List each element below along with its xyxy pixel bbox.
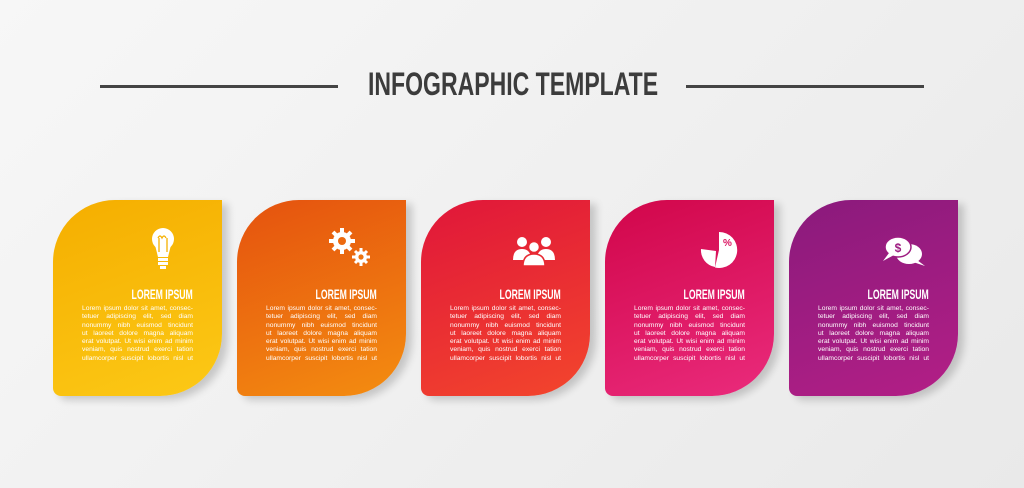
text: ullamcorper suscipit lobortis nisl ut	[82, 355, 193, 362]
panel: card 5	[789, 200, 958, 396]
text: nonummy nibh euismod tincidunt	[82, 322, 193, 329]
title line left	[100, 85, 338, 88]
panel: card 2	[237, 200, 406, 396]
text: ullamcorper suscipit lobortis nisl ut	[818, 355, 929, 362]
text: tetuer adipiscing elit, sed diam	[450, 313, 561, 320]
panel: card 3	[421, 200, 590, 396]
text: Lorem ipsum dolor sit amet, consec-	[450, 305, 561, 312]
text	[266, 305, 377, 362]
icon: people	[513, 237, 555, 266]
text: erat volutpat. Ut wisi enim ad minim	[82, 338, 193, 345]
text: erat volutpat. Ut wisi enim ad minim	[818, 338, 929, 345]
icon: speech bubbles: $	[895, 241, 902, 255]
text: Lorem ipsum dolor sit amet, consec-	[82, 305, 193, 312]
text: Lorem ipsum dolor sit amet, consec-	[634, 305, 745, 312]
panel: card 4	[605, 200, 774, 396]
text: erat volutpat. Ut wisi enim ad minim	[450, 338, 561, 345]
text	[82, 305, 193, 362]
icon: pie chart	[700, 232, 738, 268]
text: ut laoreet dolore magna aliquam	[82, 330, 193, 337]
text: nonummy nibh euismod tincidunt	[450, 322, 561, 329]
heading: LOREM IPSUM	[868, 286, 929, 302]
text: Lorem ipsum dolor sit amet, consec-	[818, 305, 929, 312]
heading: LOREM IPSUM	[500, 286, 561, 302]
text	[818, 305, 929, 362]
heading: LOREM IPSUM	[316, 286, 377, 302]
text: erat volutpat. Ut wisi enim ad minim	[266, 338, 377, 345]
icon: gears	[329, 228, 370, 266]
text: ullamcorper suscipit lobortis nisl ut	[266, 355, 377, 362]
icon: pie chart: %	[723, 238, 732, 249]
text: tetuer adipiscing elit, sed diam	[818, 313, 929, 320]
text: veniam, quis nostrud exerci tation	[82, 346, 193, 353]
text: tetuer adipiscing elit, sed diam	[82, 313, 193, 320]
text: veniam, quis nostrud exerci tation	[266, 346, 377, 353]
text: tetuer adipiscing elit, sed diam	[266, 313, 377, 320]
text	[450, 305, 561, 362]
text: ut laoreet dolore magna aliquam	[634, 330, 745, 337]
text: veniam, quis nostrud exerci tation	[634, 346, 745, 353]
text: ut laoreet dolore magna aliquam	[450, 330, 561, 337]
text: erat volutpat. Ut wisi enim ad minim	[634, 338, 745, 345]
text: ullamcorper suscipit lobortis nisl ut	[634, 355, 745, 362]
panel: card 1	[53, 200, 222, 396]
text: ut laoreet dolore magna aliquam	[818, 330, 929, 337]
heading: LOREM IPSUM	[132, 286, 193, 302]
text: nonummy nibh euismod tincidunt	[266, 322, 377, 329]
text: Lorem ipsum dolor sit amet, consec-	[266, 305, 377, 312]
text: tetuer adipiscing elit, sed diam	[634, 313, 745, 320]
text: nonummy nibh euismod tincidunt	[634, 322, 745, 329]
title: INFOGRAPHIC TEMPLATE	[368, 66, 658, 102]
heading: LOREM IPSUM	[684, 286, 745, 302]
icon: speech bubbles	[883, 238, 925, 266]
text: veniam, quis nostrud exerci tation	[450, 346, 561, 353]
icon: lightbulb	[152, 228, 174, 269]
title line right	[686, 85, 924, 88]
text: ullamcorper suscipit lobortis nisl ut	[450, 355, 561, 362]
text: nonummy nibh euismod tincidunt	[818, 322, 929, 329]
text: ut laoreet dolore magna aliquam	[266, 330, 377, 337]
text: veniam, quis nostrud exerci tation	[818, 346, 929, 353]
text	[634, 305, 745, 362]
